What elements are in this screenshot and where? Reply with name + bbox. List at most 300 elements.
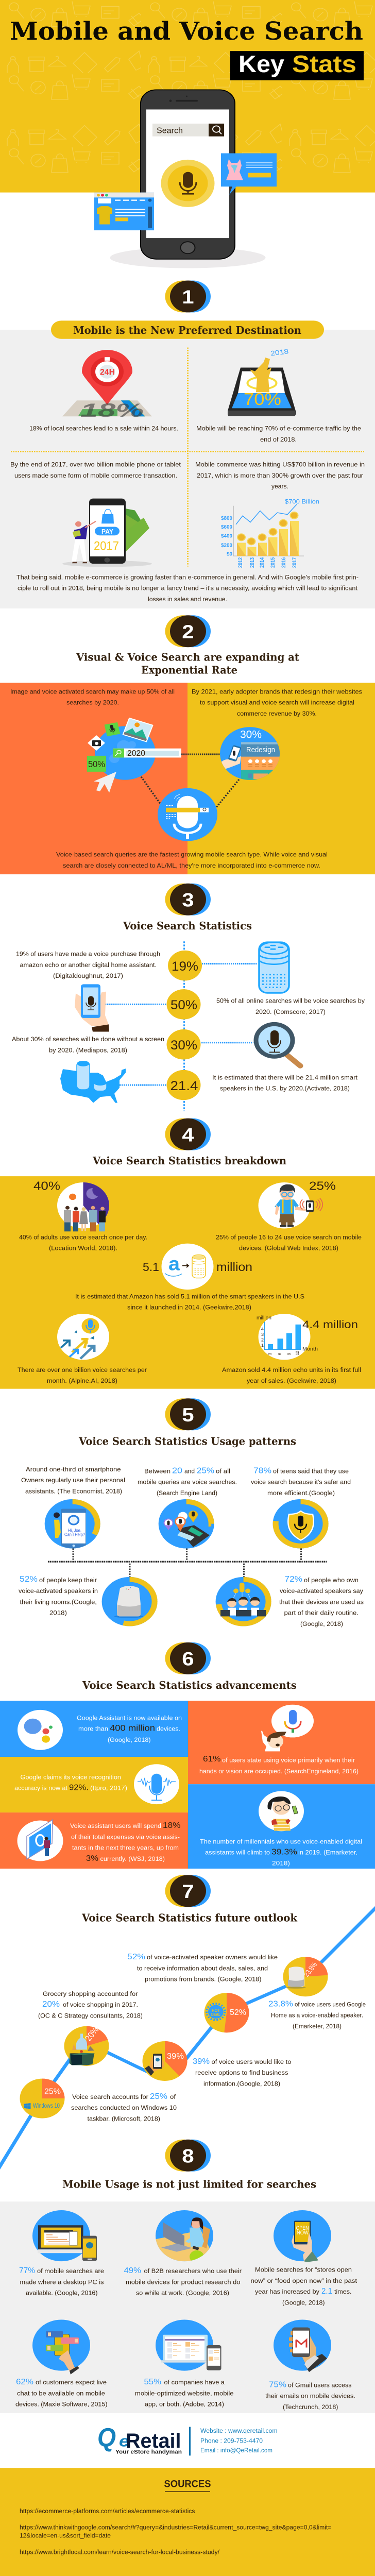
icon: 2020 visual search: 50% (88, 759, 105, 770)
badge 1 (165, 280, 211, 312)
text: stores open now: (Google, 2018) (282, 2299, 325, 2306)
heading: sources: SOURCES (164, 2478, 211, 2489)
bar chart: m-commerce revenue: 2017 (292, 557, 298, 568)
icon: personal assistant: Can I Help? (64, 1532, 85, 1537)
text: 20% grocery: (OC & C Strategy consultants, 2018) (38, 2012, 143, 2019)
icon: 30% redesign: Redesign (246, 745, 275, 754)
pie: 23.8%: 23.8% (302, 1961, 319, 1978)
text: 25% of people (216, 1233, 362, 1251)
text: 20 and 25%: 20 (172, 1466, 182, 1475)
bar chart: m-commerce revenue: 2015 (270, 557, 276, 568)
bar chart: echo units: 1 (261, 1343, 264, 1348)
icon: amazon speaker: a (168, 1253, 180, 1275)
stat circle 21.4: 21.4 (170, 1078, 198, 1093)
text: 18% expenses: 18% (163, 1821, 181, 1830)
text: 62% live chat: of customers expect live (36, 2379, 107, 2386)
text: 23.8% google home (268, 1999, 366, 2030)
stat circle 19% (168, 951, 202, 980)
icon: map pin 24h (62, 350, 152, 421)
icon: 40% day night people (57, 1182, 109, 1231)
text: 25% of people: 25% of people 16 to 24 use voice search on mobile (216, 1233, 362, 1241)
text: 77% mobile searches: available. (Google, 2016) (26, 2289, 97, 2296)
text: 49% B2B researchers (124, 2266, 242, 2296)
text: fastest growing: Voice-based search queries are the fastest growing mobile search type. While voice and visual (56, 851, 328, 858)
text: 30% without screen: About 30% of searches will be done without a screen (12, 1036, 164, 1043)
badge 3: 3 (182, 890, 194, 911)
bar chart: m-commerce revenue: $0 (227, 552, 232, 557)
text: stores open now: year has increased by (255, 2288, 320, 2295)
badge 6 (165, 1642, 211, 1674)
contact details: Phone : 209-753-4470 (200, 2437, 263, 2444)
text: 52% living rooms: 2018) (49, 1609, 67, 1617)
text: mobile first summary: That being said, mobile e-commerce is growing faster than e-commerce in general. And with Google's mobile first prin- (16, 573, 359, 581)
icon: voice man with google mic (261, 1705, 314, 1751)
heading 2: Visual & Voice Search are expanding at (76, 652, 299, 664)
subtitle: key stats: Key (238, 52, 285, 77)
text: 23.8% google home: 23.8% (268, 1999, 293, 2008)
badge 3 (165, 884, 211, 916)
text: 20 and 25%: 25% (197, 1466, 214, 1475)
subtitle: key stats (230, 51, 364, 80)
icon: woman at desk (155, 2210, 216, 2263)
text: 39% business info: of voice users would like to (211, 2058, 292, 2065)
text: 18% expenses: tants in the next three years, up from (72, 1844, 179, 1851)
icon: microphone (161, 160, 214, 207)
source links: https://www.brightlocal.com/learn/voice-search-for-local-business-study/ (20, 2548, 219, 2555)
text: 70% stat: end of 2018. (260, 436, 297, 443)
text: 25% windows taskbar (71, 2092, 177, 2122)
text: 92% accuracy: Google claims its voice recognition (21, 1773, 121, 1781)
text: mobile first summary (16, 573, 359, 603)
subtitle: key stats: Stats (292, 52, 356, 77)
text: 19% voice purchase (16, 950, 160, 979)
text: 70% stat: Mobile will be reaching 70% of e-commerce traffic by the (196, 425, 361, 432)
badge 7: 7 (182, 1881, 194, 1902)
bar chart: m-commerce revenue: 2012 (238, 557, 244, 568)
text: 52% deals: to receive information about deals, sales, and (137, 1964, 268, 1972)
text: two billion: By the end of 2017, over two billion mobile phone or tablet (10, 461, 181, 468)
text: amazon 4.4 million: year of sales. (Geekwire, 2018) (247, 1377, 336, 1384)
text: 55% companies (135, 2377, 234, 2408)
stat circle 30%: 30% (171, 1038, 197, 1053)
text: 20 and 25% (138, 1466, 237, 1497)
text: amazon sold 5.1 million: It is estimated that Amazon has sold 5.1 million of the smart speakers in the U.S (75, 1293, 304, 1300)
text: 20% grocery: 20% (42, 1999, 60, 2009)
badge 7 (165, 1875, 211, 1907)
text: 62% live chat: 62% (16, 2377, 33, 2386)
text: two billion (10, 461, 181, 479)
text: 92% accuracy: (Itpro, 2017) (90, 1784, 127, 1791)
text: 39.3% millennials: assistants will climb to (205, 1849, 270, 1856)
chart: rising growth line (0, 1906, 375, 2168)
panel: mobile usage (0, 2201, 375, 2413)
text: 50% of searches: searches by 2020. (66, 699, 119, 706)
text: 18% expenses: 3% (86, 1854, 98, 1863)
icon: google assistant (18, 1710, 63, 1750)
text: 78% of teens (251, 1466, 351, 1497)
icon: google home speaker (102, 1577, 158, 1626)
text: 39.3% millennials: The number of millennials who use voice-enabled digital (200, 1838, 362, 1845)
text: 30% revenue: commerce revenue by 30%. (237, 710, 317, 717)
text: 25% windows taskbar: of (170, 2093, 176, 2100)
text: mobile first summary: ciple to roll out in 2018, being mobile is no longer a fancy trend – it's a necessity, avoiding which will lead to significant (18, 584, 357, 591)
text: two billion: users made some form of mobile commerce transaction. (14, 472, 177, 479)
text: 50% voice searches: 2020. (Comscore, 2017) (255, 1008, 326, 1015)
text: 19% voice purchase: amazon echo or another digital home assistant. (20, 961, 157, 969)
product card: browser t-shirt (94, 193, 154, 230)
text: 78% of teens: more efficient.(Google) (267, 1489, 335, 1497)
text: stores open now: Mobile searches for “stores open (255, 2266, 352, 2273)
text: 20% grocery (38, 1990, 143, 2019)
text: 72% daily routine: part of their daily routine. (284, 1609, 359, 1617)
text: 50% voice searches: 50% of all online searches will be voice searches by (216, 997, 365, 1005)
pie: 25% windows 10: Windows 10 (33, 2103, 60, 2109)
text: 49% B2B researchers: mobile devices for product research do (126, 2278, 241, 2285)
icon: personal assistant: Hi, Joe. (68, 1528, 81, 1533)
text: 75% gmail (265, 2380, 355, 2411)
bar chart: echo units: 9 (287, 1353, 292, 1355)
text: 77% mobile searches: 77% (19, 2266, 35, 2275)
text: 21.4 million speakers: It is estimated that there will be 21.4 million smart (212, 1074, 357, 1081)
icon: map pin 24h: 24H (100, 367, 115, 377)
icon: pay phone 2017: 2017 (94, 539, 119, 553)
bar chart: m-commerce revenue: $800 (221, 516, 232, 521)
bar chart: m-commerce revenue: 2013 (250, 557, 255, 568)
text: 21.4 million speakers (212, 1074, 357, 1092)
text: one billion searches (18, 1366, 147, 1384)
pie: 39% phone (142, 2041, 187, 2081)
text: 30% revenue: By 2021, early adopter brands that redesign their websites (192, 688, 362, 695)
icon: 25% young man with phone (259, 1182, 322, 1228)
text: 55% companies: of companies have a (164, 2379, 225, 2386)
icon: smart speaker (259, 942, 289, 993)
bar chart: m-commerce revenue: $200 (221, 543, 232, 548)
panel: breakdown (0, 1176, 375, 1389)
text: 70% stat (196, 425, 361, 443)
text: 20 and 25%: of all (216, 1467, 230, 1475)
text: 25% of people: devices. (Global Web Index, 2018) (239, 1244, 338, 1251)
text: 77% mobile searches: of mobile searches are (37, 2267, 104, 2275)
text: one billion searches: month. (Alpine.AI, 2018) (47, 1377, 117, 1384)
icon: phone 70% trophy: 2018 (270, 348, 289, 358)
text: 20 and 25%: mobile queries are voice searches. (138, 1478, 237, 1485)
icon: boy with phone (259, 1791, 304, 1831)
text: m-commerce revenue (195, 461, 365, 490)
pie: 20% grocery (64, 2025, 109, 2066)
heading 5: Voice Search Statistics Usage patterns (78, 1436, 296, 1448)
text: 400 million devices: 400 million (110, 1723, 155, 1733)
text: 52% deals (127, 1952, 278, 1982)
heading 8: Mobile Usage is not just limited for searches (62, 2179, 316, 2191)
header banner (0, 0, 375, 193)
pie: 52% hot deal: DEAL (211, 2012, 220, 2017)
text: 25% windows taskbar: Voice search accounts for (72, 2093, 149, 2100)
text: 18% stat: 18% of local searches lead to a sale within 24 hours. (29, 425, 178, 432)
stat: 4.4 million: 4.4 million (302, 1318, 358, 1331)
text: 78% of teens: 78% (253, 1466, 271, 1475)
text: 25% windows taskbar: taskbar. (Microsoft, 2018) (88, 2115, 160, 2122)
text: 92% accuracy (14, 1773, 127, 1792)
search bar (152, 124, 224, 137)
bar chart: echo units: 3 (261, 1332, 264, 1337)
text: m-commerce revenue: 2017, which is more than 300% growth over the past four (197, 472, 364, 479)
text: 49% B2B researchers: 49% (124, 2266, 141, 2275)
heading 2 (76, 652, 299, 676)
pie: 20% grocery: 20% (83, 2025, 101, 2043)
text: 92% accuracy: accuracy is now at (14, 1784, 67, 1791)
contact details: Email : info@QeRetail.com (200, 2447, 272, 2454)
bar chart: echo units: 12 (295, 1351, 300, 1355)
text: 77% mobile searches (19, 2266, 104, 2296)
badge 8 (165, 2140, 211, 2172)
badge 2: 2 (182, 621, 194, 642)
text: 55% companies: app, or both. (Adobe, 2014) (145, 2400, 224, 2408)
text: 92% accuracy: 92%. (69, 1783, 89, 1792)
pie: 25% windows 10: 25% (44, 2087, 61, 2096)
heading 6: Voice Search Statistics advancements (82, 1680, 297, 1692)
icon: hand holding phone (75, 984, 109, 1031)
heading 1 (51, 320, 324, 339)
text: 77% mobile searches: made where a desktop PC is (20, 2278, 104, 2285)
text: 18% expenses: of their total expenses via voice assis- (71, 1833, 180, 1840)
text: 20 and 25%: (Search Engine Land) (157, 1489, 217, 1497)
text: 61% hands occupied (199, 1754, 359, 1775)
hero: smartphone with voice search (94, 90, 277, 268)
icon: open now phone (274, 2210, 331, 2262)
icon: 30% redesign (220, 727, 282, 781)
text: 23.8% google home: Home as a voice-enabled speaker. (271, 2011, 363, 2019)
text: 55% companies: 55% (144, 2377, 161, 2386)
text: 20 and 25%: Between (144, 1467, 171, 1475)
search bar: Search (157, 126, 183, 135)
text: 400 million devices (77, 1714, 182, 1743)
bar chart: m-commerce revenue: 2014 (260, 557, 265, 568)
icon: open now phone: OPEN (296, 2226, 309, 2231)
text: 23.8% google home: (Emarketer, 2018) (293, 2023, 342, 2030)
bar chart: echo units (257, 1314, 318, 1360)
icon: growth arrows with mic (57, 1314, 109, 1360)
bar chart: echo units: Month (302, 1347, 318, 1352)
text: 61% hands occupied: 61% (203, 1754, 220, 1764)
text: 62% live chat: chat to be available on mobile (17, 2389, 105, 2397)
stat: 5.1 million: million (216, 1261, 252, 1274)
icon: voice waveform mic (134, 1764, 179, 1804)
text: 18% expenses (70, 1821, 181, 1863)
text: 30% without screen (12, 1036, 164, 1054)
logo: QeRetail: Q (97, 2422, 116, 2452)
bar chart: m-commerce revenue: 2016 (281, 557, 287, 568)
bar chart: echo units: 4 (261, 1327, 264, 1331)
bar chart: m-commerce revenue (221, 498, 319, 568)
text: one-third (21, 1466, 125, 1495)
text: stores open now: now” or “food open now” in the past (250, 2277, 357, 2284)
text: one-third: Owners regularly use their personal (21, 1477, 125, 1484)
logo: QeRetail (97, 2422, 182, 2455)
logo: QeRetail: Your eStore handyman (115, 2449, 182, 2455)
pie: 39% phone: 39% (167, 2052, 184, 2061)
stat circle 50%: 50% (171, 998, 197, 1012)
bar chart: m-commerce revenue: $700 Billion (285, 498, 319, 505)
icon: live chat phone (32, 2319, 90, 2375)
heading 1: Mobile is the New Preferred Destination (73, 325, 301, 337)
text: 40% of adults: (Location World, 2018). (49, 1244, 117, 1251)
text: 72% daily routine: of people who own (304, 1577, 359, 1584)
text: 52% deals: of voice-activated speaker owners would like (147, 1954, 278, 1961)
text: 18% expenses: currently. (WSJ, 2018) (100, 1855, 165, 1862)
text: 49% B2B researchers: so while at work. (Google, 2016) (136, 2289, 229, 2296)
text: 78% of teens: voice search because it's safer and (251, 1478, 351, 1485)
source links: https://ecommerce-platforms.com/articles/ecommerce-statistics (20, 2507, 195, 2515)
stat circle 19%: 19% (172, 959, 198, 973)
icon: tablet with person (18, 1820, 63, 1861)
pie: 52% hot deal: HOT (212, 2008, 220, 2013)
text: amazon 4.4 million (222, 1366, 361, 1384)
text: 49% B2B researchers: of B2B researchers who use their (144, 2267, 242, 2275)
contact details: Website : www.qeretail.com (200, 2428, 277, 2434)
text: 39.3% millennials: 2018) (272, 1860, 290, 1867)
icon: laptop and phone (32, 2210, 97, 2261)
text: 52% deals: promotions from brands. (Google, 2018) (145, 1975, 262, 1982)
badge 5: 5 (182, 1404, 194, 1426)
text: 400 million devices: more than (78, 1725, 108, 1732)
pie: 52% hot deal: 52% (230, 2008, 246, 2017)
icon: amazon speaker (162, 1244, 213, 1290)
text: 52% living rooms: of people keep their (39, 1577, 97, 1584)
text: 55% companies: mobile-optimized website, mobile (135, 2389, 233, 2397)
stat circle 50% (167, 989, 201, 1020)
text: 20 and 25%: and (184, 1467, 195, 1475)
text: 39.3% millennials: 39.3% (271, 1847, 297, 1856)
text: 75% gmail: 75% (269, 2380, 286, 2389)
text: amazon sold 5.1 million (75, 1293, 304, 1311)
text: amazon 4.4 million: Amazon sold 4.4 million echo units in its first full (222, 1366, 361, 1374)
text: 39% business info: receive options to find business (195, 2069, 288, 2076)
text: mobile first summary: losses in sales and revenue. (148, 596, 227, 603)
heading 4: Voice Search Statistics breakdown (92, 1155, 286, 1167)
source links (20, 2507, 332, 2555)
badge 8: 8 (182, 2146, 194, 2167)
section 1 panel background (0, 330, 375, 608)
text: 72% daily routine (279, 1574, 364, 1628)
contact details (200, 2428, 277, 2454)
text: fastest growing: search are closely connected to AL/ML, they're more incorporated into e-commerce now. (63, 862, 320, 869)
text: 72% daily routine: that their devices are used as (279, 1598, 364, 1605)
pie: 23.8% (283, 1957, 328, 1996)
product card: dress (221, 153, 277, 195)
icon: gmail phone (274, 2319, 331, 2372)
text: one-third: assistants. (The Economist, 2018) (25, 1487, 122, 1495)
stat: 5.1 million: 5.1 (143, 1261, 159, 1274)
text: 20% grocery: of voice shopping in 2017. (63, 2001, 138, 2008)
text: 50% voice searches (216, 997, 365, 1015)
text: 61% hands occupied: hands or vision are occupied. (SearchEngineland, 2016) (199, 1768, 359, 1775)
text: 75% gmail: of Gmail users access (288, 2381, 351, 2388)
icon: shield mic (273, 1499, 329, 1548)
badge 4: 4 (182, 1125, 194, 1146)
badge 6: 6 (182, 1649, 194, 1670)
text: 30% without screen: by 2020. (Mediapos, 2018) (49, 1046, 127, 1054)
text: 400 million devices: Google Assistant is now available on (77, 1714, 182, 1721)
text: 25% windows taskbar: searches conducted on Windows 10 (71, 2104, 177, 2111)
text: 50% of searches: Image and voice activated search may make up 50% of all (10, 688, 175, 695)
icon: pay phone 2017: PAY (101, 528, 113, 536)
bar chart: m-commerce revenue: $600 (221, 525, 232, 530)
text: 78% of teens: of teens said that they use (273, 1467, 349, 1475)
text: 52% living rooms: voice-activated speakers in (19, 1587, 98, 1595)
text: stores open now: 2.1 (321, 2286, 332, 2296)
badge 4 (165, 1118, 211, 1150)
text: 75% gmail: (Techcrunch, 2018) (283, 2403, 338, 2411)
badge 5 (165, 1398, 211, 1430)
bar chart: m-commerce revenue: $400 (221, 534, 232, 539)
icon: map pin 24h: 18% (80, 400, 144, 421)
panel: sources (0, 2468, 375, 2576)
text: 39.3% millennials (200, 1838, 362, 1867)
panel: advancements (0, 1701, 375, 1869)
logo: QeRetail: e (119, 2432, 129, 2450)
text: 52% deals: 52% (127, 1952, 145, 1961)
pie: 25% windows 10 (20, 2079, 65, 2119)
icon: voice mic search (158, 788, 217, 841)
text: m-commerce revenue: Mobile commerce was hitting US$700 billion in revenue in (195, 461, 365, 468)
bar chart: echo units: 3 (268, 1353, 272, 1355)
stat circle 21.4 (167, 1070, 201, 1100)
text: 50% of searches (10, 688, 175, 706)
text: 25% windows taskbar: 25% (150, 2092, 167, 2101)
text: 19% voice purchase: (Digitaldoughnut, 2017) (53, 972, 123, 979)
badge 1: 1 (182, 286, 194, 308)
icon: US map with speakers (60, 1061, 126, 1103)
text: 61% hands occupied: of users state using voice primarily when their (222, 1756, 355, 1764)
icon: magnifier with mic (256, 1024, 300, 1066)
heading 3: Voice Search Statistics (123, 920, 252, 933)
text: fastest growing (56, 851, 328, 869)
icon: phone 70% trophy: 70% (244, 389, 281, 409)
text: 39% business info (193, 2057, 292, 2087)
stat: 40%: 40% (33, 1180, 60, 1193)
icon: pay phone 2017 (62, 499, 152, 567)
text: 40% of adults: 40% of adults use voice search once per day. (19, 1233, 147, 1241)
pie: 52% hot deal (204, 1993, 249, 2032)
text: 62% live chat (15, 2377, 107, 2408)
text: 75% gmail: their emails on mobile devices. (265, 2392, 355, 2400)
text: 62% live chat: devices. (Maxie Software, 2015) (15, 2400, 107, 2408)
text: stores open now: times. (334, 2288, 352, 2295)
text: 52% living rooms: their living rooms.(Google, (20, 1598, 97, 1605)
panel: visual and voice search (0, 683, 375, 874)
heading 7: Voice Search Statistics future outlook (81, 1912, 298, 1924)
text: 39% business info: 39% (193, 2057, 210, 2066)
source links: 12&locale=en-us&sort_field=date (20, 2532, 111, 2539)
source links: https://www.thinkwithgoogle.com/search/#?query=&industries=Retail&current_source=twg_site&page=0,0&limit= (20, 2523, 332, 2531)
stat circle 30% (167, 1029, 201, 1059)
icon: 30% redesign: 30% (240, 728, 262, 740)
bar chart: echo units: 6 (278, 1353, 282, 1355)
icon: personal assistant (45, 1499, 100, 1548)
text: 400 million devices: devices. (157, 1725, 180, 1732)
bar chart: echo units: 2 (261, 1337, 264, 1342)
bar chart: echo units: million (257, 1316, 271, 1321)
text: stores open now (250, 2266, 357, 2306)
icon: 2020 visual search: 2020 (127, 749, 145, 758)
icon: mobile queries pins (159, 1499, 214, 1548)
text: 20% grocery: Grocery shopping accounted for (43, 1990, 138, 1997)
text: 21.4 million speakers: speakers in the U.S. by 2020.(Activate, 2018) (220, 1084, 350, 1092)
text: 400 million devices: (Google, 2018) (108, 1736, 150, 1743)
badge 2 (165, 615, 211, 647)
text: 39% business info: information.(Google, 2018) (203, 2080, 280, 2087)
text: amazon sold 5.1 million: since it launched in 2014. (Geekwire,2018) (127, 1303, 251, 1311)
